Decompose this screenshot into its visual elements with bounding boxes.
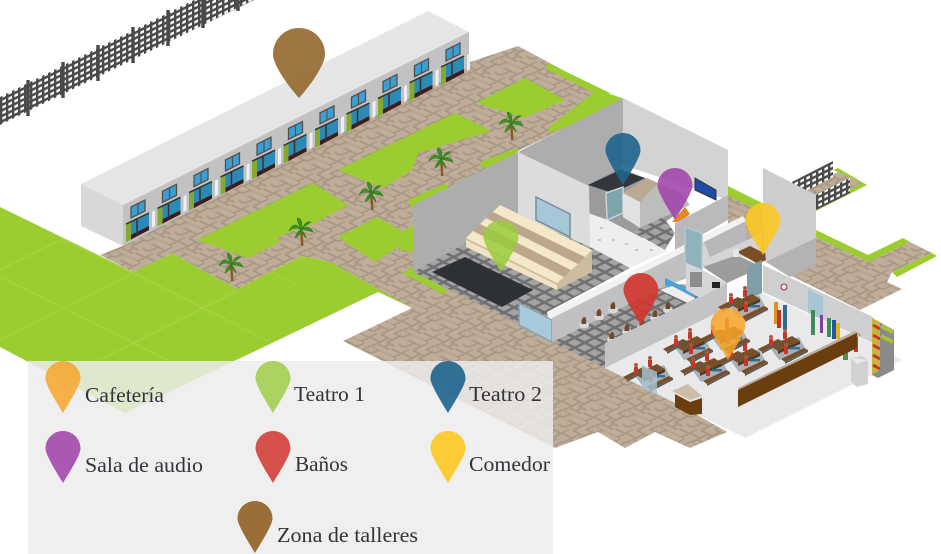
pin: teatro 1 [484, 220, 518, 272]
pin: baños [624, 273, 658, 325]
floor [413, 215, 630, 342]
food shelf [872, 318, 894, 378]
fridge [851, 356, 868, 387]
legend: comedor: Comedor [469, 452, 550, 476]
palms [219, 112, 523, 281]
tables [623, 286, 808, 392]
glass kiosk [642, 365, 657, 395]
legend: sala de audio: Sala de audio [85, 453, 203, 477]
legend: sala de audio [46, 431, 203, 483]
pin: cafetería [710, 308, 746, 360]
cafeteria floor [605, 293, 902, 438]
wall upper [763, 168, 816, 262]
wall lower [766, 238, 816, 277]
pin: zona de talleres [273, 28, 325, 98]
bathrooms [547, 216, 746, 368]
back wall face [552, 250, 688, 342]
audio room [633, 178, 728, 250]
table [737, 246, 772, 264]
legend: cafetería: Cafetería [85, 383, 165, 407]
dining room interior [702, 222, 762, 283]
back wall [518, 152, 590, 248]
grass: courtyard lawn strips [197, 63, 622, 294]
fence: top left [0, 0, 260, 125]
theatre 1 room [413, 152, 630, 342]
legend: cafetería [46, 361, 165, 413]
legend panel [28, 361, 553, 554]
sink [665, 278, 695, 300]
pin: sala de audio [658, 168, 692, 220]
stage [432, 257, 533, 307]
left wall [413, 152, 518, 272]
legend: teatro 2 [430, 361, 542, 413]
door [519, 303, 552, 342]
legend: teatro 1 [256, 361, 365, 413]
legend: baños: Baños [295, 452, 348, 476]
back wall top [547, 216, 746, 318]
door [685, 227, 702, 270]
legend: zona de talleres [238, 501, 418, 553]
door right [747, 260, 762, 302]
cafeteria back wall [763, 265, 873, 343]
bleachers [466, 205, 592, 290]
back fenced yard [792, 161, 867, 211]
building: workshops row [81, 11, 470, 246]
legend: comedor [430, 431, 550, 483]
counter [738, 331, 862, 407]
legend: zona de talleres: Zona de talleres [277, 523, 418, 547]
legend: teatro 2: Teatro 2 [469, 382, 542, 406]
legend: baños [256, 431, 348, 483]
dining room block [685, 168, 816, 302]
white corridor [588, 213, 685, 268]
legend: teatro 1: Teatro 1 [294, 382, 365, 406]
theatre 2 room [518, 98, 728, 240]
pin: comedor [746, 203, 780, 255]
pavement: central courtyard [100, 46, 622, 308]
window [536, 197, 570, 237]
grass: big lawn left [0, 207, 420, 413]
service block [686, 263, 727, 298]
front wall [605, 283, 727, 368]
pavement: lower plaza [343, 280, 727, 448]
bathroom floor [552, 283, 727, 368]
pin: teatro 2 [606, 133, 640, 185]
reception desk [672, 384, 702, 415]
people [774, 302, 858, 360]
pavement: right side [728, 195, 932, 310]
grass: right strips [728, 186, 937, 277]
